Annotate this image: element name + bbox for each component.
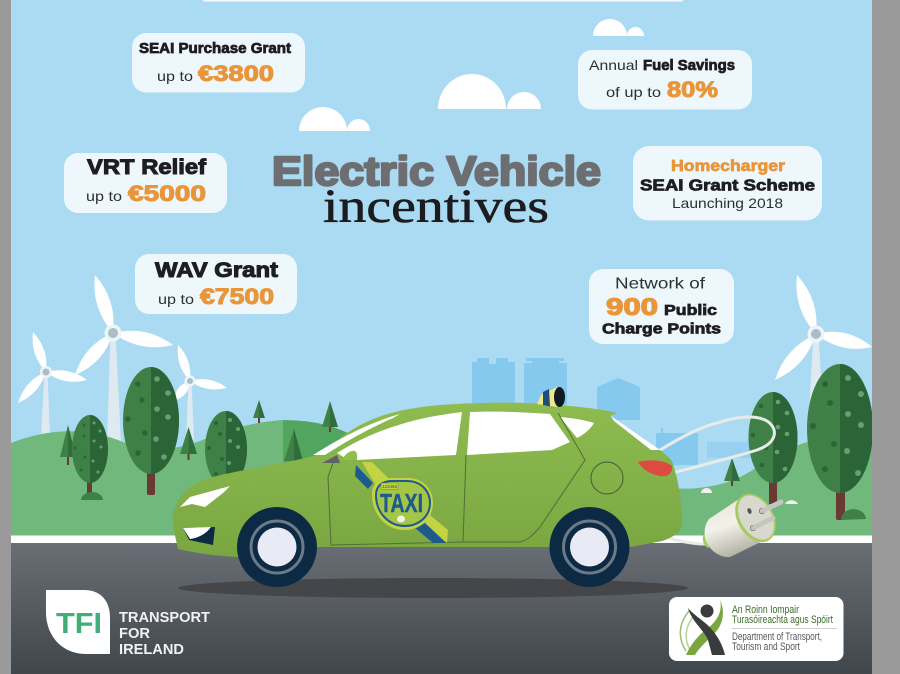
wind turbine: far left xyxy=(18,332,87,437)
callout: public charge points xyxy=(589,269,734,344)
city skyline xyxy=(472,358,750,465)
Department of Transport logo: Tourism and Sport xyxy=(732,641,800,653)
TFI logo: TRANSPORT xyxy=(119,610,210,626)
callout: fuel savings: of up to xyxy=(606,84,661,100)
tail light xyxy=(638,460,672,476)
callout: VRT relief xyxy=(64,153,227,213)
pebbles xyxy=(701,488,798,504)
road xyxy=(11,543,872,674)
fuel cap xyxy=(591,462,623,494)
title: Electric Vehicle xyxy=(272,148,601,194)
wind turbine: right xyxy=(775,275,872,410)
callout: SEAI purchase grant: €3800 xyxy=(198,61,274,86)
wind turbine: small centre-left xyxy=(175,345,227,440)
taxi badge xyxy=(372,478,433,530)
Department of Transport logo xyxy=(669,597,844,661)
hills xyxy=(11,420,872,540)
fog lamp xyxy=(183,527,215,545)
tree: right small xyxy=(748,392,798,504)
callout: homecharger xyxy=(633,146,822,220)
taxi badge: TAXI xyxy=(380,488,423,518)
pine trees xyxy=(60,400,740,486)
tree: large left xyxy=(123,367,179,495)
title xyxy=(272,148,601,233)
Department of Transport logo: Turasóireachta agus Spóirt xyxy=(732,614,833,626)
callout: fuel savings: 80% xyxy=(667,77,718,102)
callout: public charge points: 900 xyxy=(606,294,658,321)
Department of Transport logo: An Roinn Iompair xyxy=(732,604,799,616)
callout: VRT relief: VRT Relief xyxy=(87,156,207,179)
white kerb line xyxy=(11,536,872,543)
TFI logo: TFI xyxy=(56,608,102,640)
callout: WAV grant xyxy=(135,254,297,314)
callout: fuel savings: Annual xyxy=(589,57,638,73)
callout: SEAI purchase grant xyxy=(132,33,305,92)
car: green taxi xyxy=(173,387,682,587)
rear wheel xyxy=(550,507,630,587)
callout: fuel savings xyxy=(578,50,752,110)
tree: centre left xyxy=(205,411,247,487)
callout: WAV grant: WAV Grant xyxy=(155,259,278,282)
wind turbine: large left xyxy=(75,275,173,442)
callout: homecharger: SEAI Grant Scheme xyxy=(640,178,815,194)
rear screen strip xyxy=(611,416,660,450)
car shadow xyxy=(178,578,688,598)
TFI logo: IRELAND xyxy=(119,642,184,658)
charging cable xyxy=(606,417,774,544)
taxi badge: 123456 xyxy=(382,484,397,489)
TFI logo xyxy=(46,590,210,658)
rear side window xyxy=(467,412,570,455)
harp figure emblem xyxy=(680,600,725,655)
callout: WAV grant: €7500 xyxy=(200,284,274,309)
Department of Transport logo: Department of Transport, xyxy=(732,631,822,643)
callout: WAV grant: up to xyxy=(158,291,194,307)
callout: public charge points: Network of xyxy=(615,276,706,292)
callout: VRT relief: €5000 xyxy=(128,181,206,206)
callout: public charge points: Public xyxy=(664,302,717,319)
tree: small left xyxy=(72,415,108,500)
sky background xyxy=(11,0,872,540)
front side window xyxy=(337,412,462,460)
windscreen strip xyxy=(313,414,400,455)
callout: SEAI purchase grant: SEAI Purchase Grant xyxy=(139,41,291,57)
callout: homecharger: Homecharger xyxy=(671,158,785,175)
tree: right large xyxy=(807,364,873,520)
electric plug xyxy=(703,486,784,557)
quarter window xyxy=(560,417,594,438)
callout: homecharger: Launching 2018 xyxy=(672,195,783,211)
title: incentives xyxy=(323,180,549,233)
roof beacon xyxy=(537,387,565,407)
callout: VRT relief: up to xyxy=(86,188,122,204)
front wheel xyxy=(237,507,317,587)
clouds xyxy=(299,19,644,131)
taxi sash xyxy=(355,462,448,543)
headlight xyxy=(180,486,230,507)
wing mirror xyxy=(322,455,340,463)
callout: SEAI purchase grant: up to xyxy=(157,68,193,84)
callout: fuel savings: Fuel Savings xyxy=(643,58,735,74)
callout: public charge points: Charge Points xyxy=(602,320,721,338)
TFI logo: FOR xyxy=(119,626,151,642)
car body xyxy=(173,403,682,557)
door lines xyxy=(328,413,585,545)
